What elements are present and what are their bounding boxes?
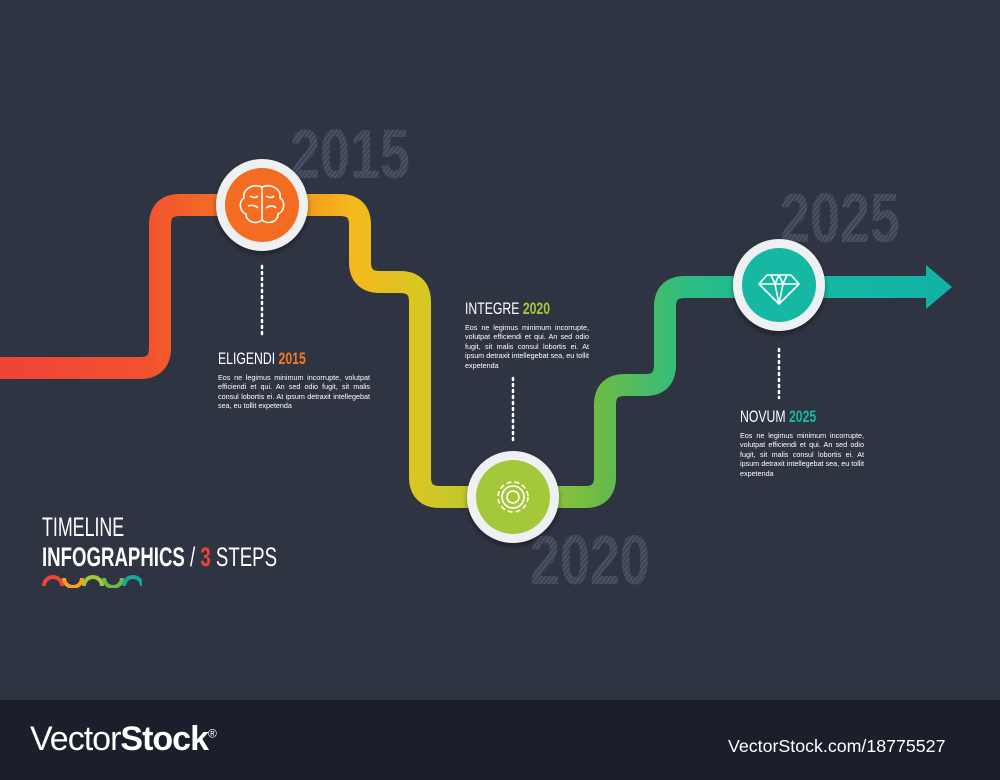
year: 2020: 2020 [530, 521, 650, 600]
title: INFOGRAPHICS / 3 STEPS [42, 542, 277, 572]
text block: novum 2025: NOVUM 2025 [740, 407, 816, 426]
title [42, 512, 277, 588]
text block: integre 2020 [465, 299, 589, 370]
text block: novum 2025: Eos ne legimus minimum incorrupte, volutpat efficiendi et qui. An sed odio fugit, sit malis consul lobortis ei. At ipsum detraxit intellegebat sea, eu tollit expetenda [740, 431, 864, 478]
arrow head [926, 265, 952, 309]
footer [0, 700, 1000, 780]
year: 2015: 2015 [290, 115, 410, 194]
node 2: gear icon [467, 451, 559, 543]
text block: eligendi 2015: ELIGENDI 2015 [218, 349, 306, 368]
footer: VectorStock® [30, 720, 216, 758]
decorative arcs [42, 575, 142, 588]
text block: eligendi 2015 [218, 349, 370, 410]
title: TIMELINE [42, 512, 124, 542]
text block: eligendi 2015: Eos ne legimus minimum incorrupte, volutpat efficiendi et qui. An sed odio fugit, sit malis consul lobortis ei. At ipsum detraxit intellegebat sea, eu tollit expetenda [218, 373, 370, 410]
dotted connectors [262, 266, 779, 442]
text block: integre 2020: INTEGRE 2020 [465, 299, 550, 318]
footer: VectorStock.com/18775527 [728, 736, 945, 756]
text block: integre 2020: Eos ne legimus minimum incorrupte, volutpat efficiendi et qui. An sed odio fugit, sit malis consul lobortis ei. At ipsum detraxit intellegebat sea, eu tollit expetenda [465, 323, 589, 370]
road path [0, 205, 928, 497]
node 3: diamond icon [733, 239, 825, 331]
node 1: brain icon [216, 159, 308, 251]
year: 2025: 2025 [780, 179, 900, 258]
text block: novum 2025 [740, 407, 864, 478]
